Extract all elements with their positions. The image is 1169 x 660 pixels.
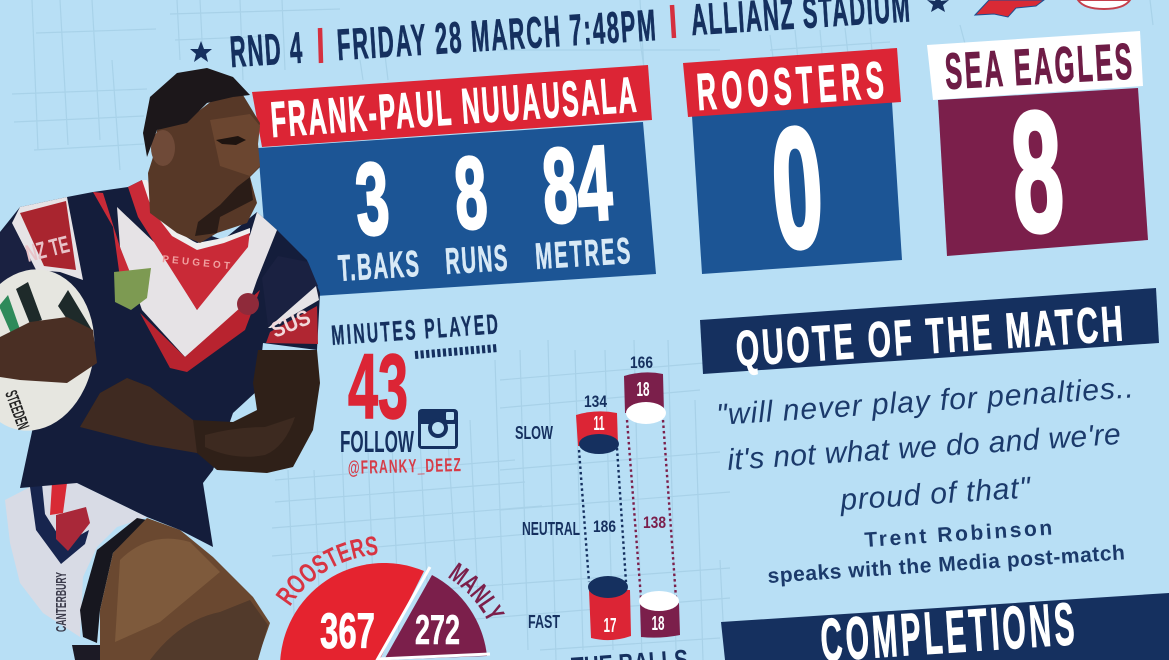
arm and hand (80, 350, 320, 473)
round number: RND 4 (229, 25, 304, 77)
label: minutes played: MINUTES PLAYED (330, 308, 499, 351)
stat: tackle breaks: 3 (352, 141, 392, 257)
panel: quote of the match (700, 288, 1159, 588)
stat: runs: RUNS (444, 238, 509, 283)
neck and face (148, 95, 260, 243)
cylinder: roosters fast (588, 576, 631, 640)
cylinder: roosters slow: 11 (594, 413, 604, 435)
thigh (100, 518, 270, 660)
player photo illustration: NZ TE (23, 231, 72, 268)
follow instagram (340, 409, 461, 479)
cylinder: roosters slow (576, 411, 619, 454)
score: sea eagles: 8 (1006, 76, 1068, 269)
values: 186 (593, 517, 616, 536)
heading: sea eagles: SEA EAGLES (943, 33, 1133, 100)
jersey chevron white (117, 207, 277, 357)
stat: tackle breaks (337, 141, 420, 290)
icon: star right (927, 0, 949, 12)
ball (0, 261, 105, 439)
header: match details (190, 0, 949, 77)
panel: completions (721, 591, 1169, 660)
quote text (715, 371, 1135, 517)
cylinder: manly fast (639, 591, 680, 638)
values: 166 (630, 353, 653, 372)
eye (216, 136, 246, 145)
quote text: proud of that" (838, 471, 1032, 517)
quote text: "will never play for penalties.. (715, 371, 1135, 432)
label: roosters: ROOSTERS (276, 536, 378, 606)
right sleeve (262, 256, 318, 326)
icon: instagram (418, 409, 458, 449)
player name: FRANK-PAUL NUUAUSALA (269, 67, 638, 148)
heading: quote of the match: QUOTE OF THE MATCH (734, 296, 1124, 377)
left hand on ball (0, 317, 97, 383)
label: manly: MANLY (448, 562, 505, 619)
panel: player stats (252, 65, 656, 299)
player photo illustration: PEUGEOT (162, 254, 230, 272)
cylinder: manly slow: 18 (636, 379, 650, 401)
cylinder: manly fast: 18 (652, 613, 664, 635)
stat: metres (534, 124, 632, 278)
quote text: it's not what we do and we're (726, 418, 1122, 477)
stat: metres: 84 (539, 124, 615, 246)
row labels: SLOW (515, 423, 553, 443)
label: follow: FOLLOW (340, 424, 414, 459)
left sleeve (12, 197, 83, 280)
score: roosters: 0 (766, 92, 828, 285)
lower leg (72, 645, 122, 660)
row labels: NEUTRAL (522, 519, 580, 539)
values: 138 (643, 513, 666, 532)
chart: play the ball speed cylinders (515, 353, 689, 660)
minutes played (330, 308, 499, 438)
quote attribution: speaks with the Media post-match (767, 541, 1126, 588)
shorts band (80, 518, 147, 643)
jersey chevron red (128, 180, 250, 310)
logo: sea eagles (1078, 0, 1130, 9)
value: 272: 272 (415, 606, 460, 653)
values (584, 353, 666, 536)
player photo illustration (0, 68, 320, 660)
stat: tackle breaks: T.BAKS (337, 244, 420, 290)
instagram handle: @FRANKY_DEEZ (348, 456, 461, 479)
values: 134 (584, 392, 607, 411)
value: 43 minutes: 43 (348, 336, 408, 438)
chart: possession semicircle (276, 536, 505, 660)
value: 367: 367 (320, 603, 375, 659)
player photo illustration: SUS (268, 304, 314, 343)
stat: runs (444, 135, 509, 283)
quote attribution: Trent Robinson (864, 517, 1053, 552)
heading: roosters: ROOSTERS (695, 50, 886, 121)
quote attribution (767, 517, 1126, 588)
stat: metres: METRES (534, 231, 632, 278)
hair (143, 68, 250, 157)
icon: star left (190, 41, 212, 62)
row labels: FAST (528, 612, 560, 632)
logo: roosters (975, 0, 1044, 17)
cylinder: roosters fast: 17 (604, 615, 616, 637)
beard (195, 177, 253, 236)
jersey body (0, 180, 320, 547)
collar (142, 180, 250, 250)
cylinder: manly slow (624, 372, 666, 424)
ear (151, 130, 175, 166)
panel: roosters score (683, 48, 902, 285)
panel: sea eagles score (927, 31, 1148, 269)
segment: manly (384, 575, 487, 660)
shorts (5, 483, 147, 637)
stat: runs: 8 (451, 135, 490, 251)
player photo illustration: STEEDEN (1, 388, 33, 432)
badge (114, 268, 151, 310)
segment: roosters (280, 563, 424, 660)
date and time: FRIDAY 28 MARCH 7:48PM (336, 2, 657, 70)
player photo illustration: CANTERBURY (53, 572, 70, 632)
row labels (515, 423, 580, 632)
